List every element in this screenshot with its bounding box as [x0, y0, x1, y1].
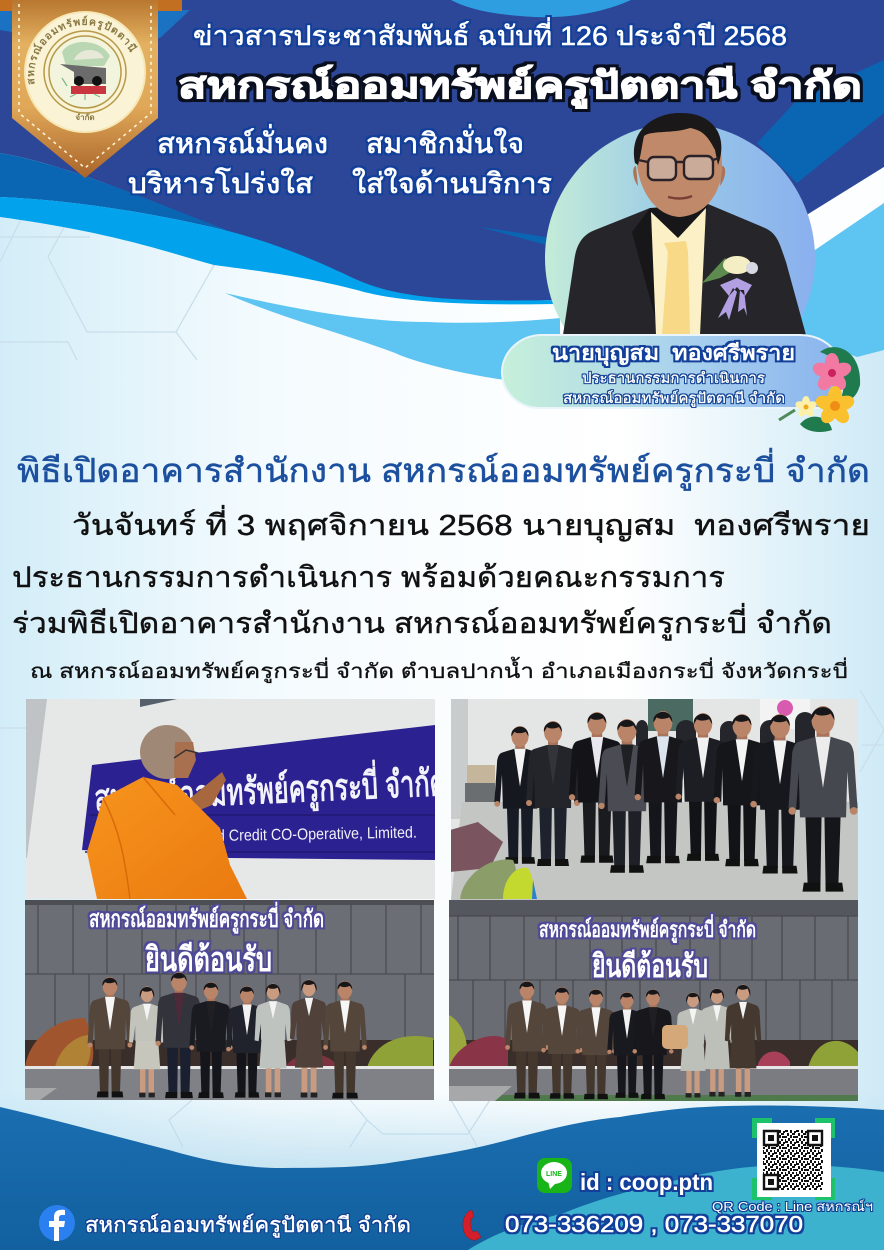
suit [563, 204, 806, 335]
top navy wave [0, 0, 884, 304]
photo: group in lobby [450, 699, 858, 900]
photo: monk at sign: d Credit CO-Operative, Limited. [217, 825, 417, 845]
shirt [651, 208, 706, 335]
tie [662, 241, 690, 335]
slogan: สหกรณ์มั่นคง [157, 124, 328, 159]
head [637, 118, 722, 217]
main title: สหกรณ์ออมทรัพย์ครูปัตตานี จำกัด [178, 65, 862, 109]
body text: ประธานกรรมการดำเนินการ พร้อมด้วยคณะกรรมการ [12, 562, 725, 594]
background hexagon pattern [0, 207, 884, 1147]
event heading: พิธีเปิดอาคารสำนักงาน สหกรณ์ออมทรัพย์ครูกระบี่ จำกัด [17, 448, 870, 491]
LINE id: id : coop.ptn [580, 1169, 713, 1195]
LINE icon: LINE [546, 1171, 562, 1178]
logo: cooperative seal [24, 11, 146, 133]
LINE icon [537, 1158, 572, 1193]
wall sign: สหกรณ์ออมทรัพย์ครูกระบี่ จำกัด [539, 913, 756, 944]
gold ribbon badge [12, 0, 158, 178]
monk [190, 772, 226, 810]
gift basket [662, 1025, 688, 1049]
hair [634, 113, 721, 165]
photo: officials at welcome wall 2 [449, 900, 858, 1101]
QR code [752, 1118, 835, 1200]
role: ประธานกรรมการดำเนินการ [582, 371, 765, 387]
people [88, 972, 367, 1098]
sign [82, 725, 435, 860]
right white and pale-blue waves [225, 167, 884, 380]
logo: cooperative seal: สหกรณ์ออมทรัพย์ครูปัตตานี [28, 16, 138, 85]
organisation: สหกรณ์ออมทรัพย์ครูปัตตานี จำกัด [563, 390, 785, 407]
Facebook icon [39, 1205, 75, 1241]
phone icon [463, 1210, 481, 1240]
footer teal wave [468, 1165, 884, 1250]
lower haze above footer [0, 1090, 884, 1170]
photo: officials at welcome wall 2: ยินดีต้อนรับ [592, 948, 708, 984]
name plate [502, 335, 840, 408]
body text: ร่วมพิธีเปิดอาคารสำนักงาน สหกรณ์ออมทรัพย์ครูกระบี่ จำกัด [12, 603, 832, 641]
flowers [779, 347, 860, 432]
body text: วันจันทร์ ที่ 3 พฤศจิกายน 2568 นายบุญสม ทองศรีพราย [72, 505, 870, 543]
photo: officials at welcome wall 1 [25, 900, 434, 1100]
photo: officials at welcome wall 1: ยินดีต้อนรับ [145, 941, 272, 979]
people [505, 981, 761, 1099]
plants [450, 822, 503, 872]
slogan: บริหารโปร่งใส [128, 167, 313, 199]
plant beds [466, 1040, 858, 1066]
photo: monk at sign: สหกรณ์ออมทรัพย์ครูกระบี่ จำกัด [93, 756, 447, 822]
QR caption: QR Code : Line สหกรณ์ฯ [712, 1199, 873, 1214]
crowd behind [636, 712, 815, 746]
slogan [128, 124, 552, 199]
men [494, 706, 858, 892]
footer wave [0, 1106, 884, 1250]
slogan: ใส่ใจด้านบริการ [352, 167, 552, 199]
body text: ณ สหกรณ์ออมทรัพย์ครูกระบี่ จำกัด ตำบลปากน้ำ อำเภอเมืองกระบี่ จังหวัดกระบี่ [30, 657, 848, 684]
Facebook page name: สหกรณ์ออมทรัพย์ครูปัตตานี จำกัด [85, 1213, 411, 1238]
ribbon cap [0, 0, 182, 11]
glasses [638, 156, 719, 180]
president portrait [545, 113, 815, 334]
corsage [702, 256, 758, 320]
president name: นายบุญสม ทองศรีพราย [552, 341, 795, 367]
ears [633, 166, 725, 186]
slogan: สมาชิกมั่นใจ [366, 124, 524, 159]
photo: monk at sign [26, 699, 447, 899]
logo: cooperative seal: จำกัด [75, 113, 95, 122]
body text [12, 505, 870, 684]
wall sign: สหกรณ์ออมทรัพย์ครูกระบี่ จำกัด [89, 901, 324, 934]
plant beds [25, 1040, 434, 1068]
newsletter issue line: ข่าวสารประชาสัมพันธ์ ฉบับที่ 126 ประจำปี 2568 [193, 17, 787, 51]
phone numbers: 073-336209 , 073-337070 [505, 1211, 803, 1237]
